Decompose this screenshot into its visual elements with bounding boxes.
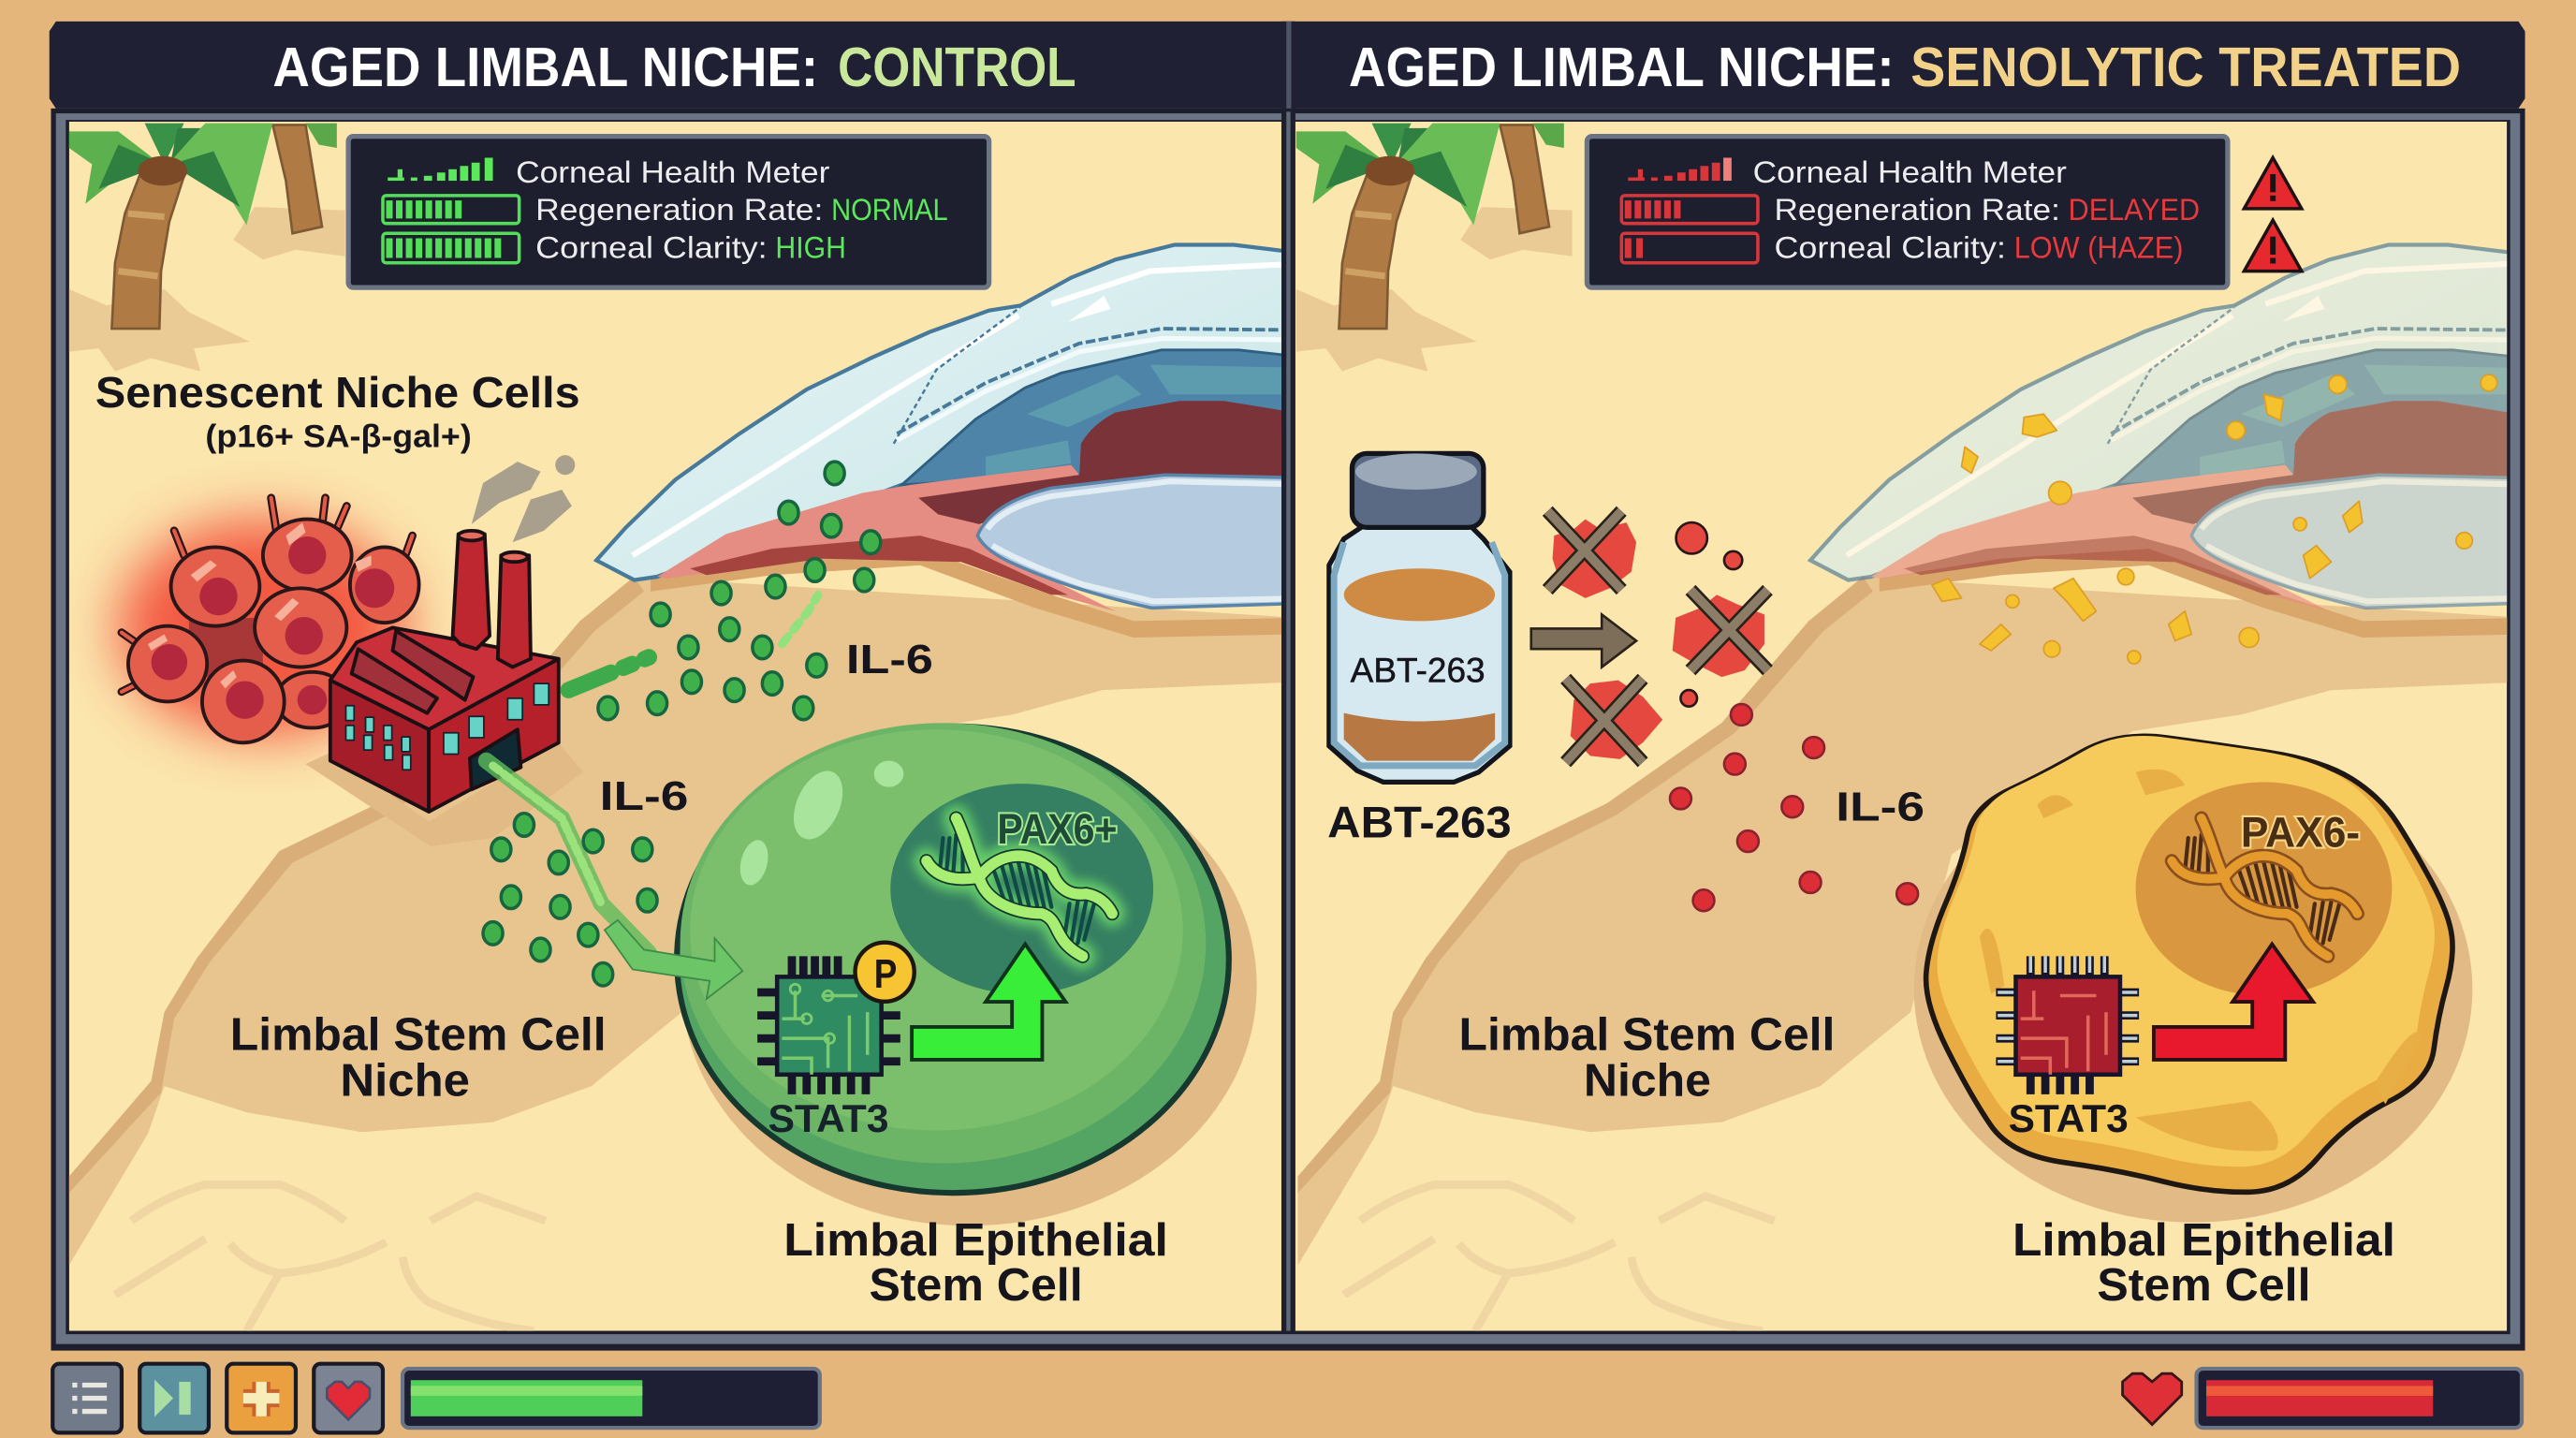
spiky protrusions	[122, 498, 413, 692]
label: limbal stem cell niche control: Limbal Stem Cell	[230, 1009, 607, 1060]
regeneration bar	[383, 196, 520, 224]
damaged yellow stem cell	[1926, 736, 2452, 1192]
signal icon	[1628, 157, 1732, 181]
warning icon lower	[2244, 220, 2302, 271]
label: senescent niche cells	[95, 368, 580, 454]
label: senescent niche cells: Senescent Niche Cells	[95, 368, 580, 417]
STAT3 label: STAT3	[768, 1096, 889, 1140]
button: plus	[227, 1364, 296, 1432]
corneal health meter: control: Regeneration Rate:	[535, 193, 823, 227]
label: limbal epithelial stem cell treated	[2012, 1215, 2395, 1311]
yellow debris	[1932, 374, 2497, 664]
progress bar: treated	[2197, 1369, 2522, 1428]
green stem cell	[677, 723, 1229, 1193]
warning icon upper	[2244, 157, 2302, 209]
corneal health meter: control	[348, 137, 989, 287]
nucleus	[2136, 782, 2392, 996]
senescent cell glow	[118, 520, 407, 736]
bottle: ABT-263	[1351, 651, 1486, 689]
green IL-6 stream	[487, 594, 818, 953]
label: limbal stem cell niche treated	[1459, 1009, 1835, 1107]
corneal health meter: control: HIGH	[775, 231, 846, 265]
sand ground and ripples	[69, 549, 1298, 1331]
button: menu	[52, 1364, 122, 1432]
nucleus	[890, 784, 1153, 994]
bottle	[1329, 453, 1510, 782]
corneal health meter: control: Corneal Health Meter	[516, 155, 830, 189]
shadow under stem cell	[1914, 756, 2472, 1223]
corneal health meter: treated: Regeneration Rate:	[1774, 193, 2060, 227]
red elbow arrow	[2154, 944, 2313, 1060]
label: limbal stem cell niche control: Niche	[340, 1056, 470, 1107]
heart icon	[2123, 1373, 2182, 1425]
drug arrow	[1531, 614, 1636, 668]
label: limbal epithelial stem cell treated: Stem Cell	[2097, 1260, 2311, 1311]
label: limbal epithelial stem cell control	[783, 1215, 1168, 1311]
label: IL-6 upper: IL-6	[846, 637, 933, 682]
corneal health meter: control: Corneal Clarity:	[535, 231, 768, 265]
PAX6- label: PAX6-	[2241, 809, 2360, 857]
red IL-6 particles	[1670, 704, 1918, 911]
label: limbal stem cell niche control	[230, 1009, 607, 1107]
DNA helix	[927, 818, 1112, 956]
factory	[330, 531, 559, 812]
green elbow arrow	[912, 944, 1065, 1060]
signal arrow into cell	[605, 920, 742, 999]
heading: control: CONTROL	[838, 36, 1076, 98]
heading: senolytic treated	[1349, 36, 2461, 98]
button: heart	[314, 1364, 383, 1432]
progress bar: control	[402, 1369, 820, 1428]
label: limbal stem cell niche treated: Limbal Stem Cell	[1459, 1009, 1835, 1060]
corneal health meter: treated: Corneal Health Meter	[1753, 155, 2067, 189]
heading: senolytic treated: AGED LIMBAL NICHE:	[1349, 36, 1895, 98]
IL-6 particles lower	[483, 814, 657, 986]
cell mottling	[1980, 770, 2422, 1152]
phosphate coin	[856, 943, 915, 1002]
corneal health meter: treated: Corneal Clarity:	[1774, 231, 2006, 265]
corneal health meter: control: NORMAL	[831, 193, 948, 227]
label: senescent niche cells: (p16+ SA-β-gal+)	[205, 418, 472, 454]
shadow under stem cell	[687, 824, 1257, 1225]
destroyed cell 1	[1547, 511, 1636, 598]
regeneration bar	[1621, 196, 1758, 224]
STAT3 chip red	[1996, 956, 2139, 1094]
STAT3 label: STAT3	[2009, 1096, 2129, 1140]
hazy eye cross-section	[1810, 244, 2528, 611]
clarity bar	[383, 233, 520, 263]
label: IL-6 lower: IL-6	[600, 773, 688, 819]
title bar	[50, 22, 2525, 109]
smoke	[472, 455, 575, 542]
heading: control: AGED LIMBAL NICHE:	[272, 36, 818, 98]
destroyed cell 2	[1673, 590, 1767, 677]
label: limbal epithelial stem cell control: Limbal Epithelial	[783, 1215, 1168, 1266]
STAT3 chip	[757, 956, 900, 1094]
cell fragments	[1676, 522, 1742, 707]
label: limbal epithelial stem cell treated: Limbal Epithelial	[2012, 1215, 2395, 1266]
label: limbal epithelial stem cell control: Stem Cell	[869, 1260, 1083, 1311]
signal icon	[388, 157, 493, 181]
button: skip	[139, 1364, 209, 1432]
cell highlights	[736, 761, 903, 888]
corneal health meter: treated: LOW (HAZE)	[2014, 231, 2183, 265]
IL-6 particles upper	[598, 462, 881, 720]
clarity bar	[1621, 233, 1758, 263]
eye cross-section	[596, 244, 1314, 611]
senescent niche cells	[122, 498, 419, 742]
label: limbal stem cell niche treated: Niche	[1584, 1056, 1711, 1107]
heading: senolytic treated: SENOLYTIC TREATED	[1910, 36, 2461, 98]
panel: senolytic treated	[1295, 122, 2528, 1331]
palm trees	[69, 124, 345, 372]
PAX6+ label: PAX6+	[997, 805, 1117, 853]
destroyed cell 3	[1566, 679, 1662, 762]
label: IL-6 treated: IL-6	[1836, 785, 1925, 830]
center divider	[1281, 22, 1295, 1331]
panel: control	[69, 122, 1314, 1331]
phosphate coin: P	[874, 951, 897, 997]
sand ground and ripples	[1298, 549, 2526, 1331]
corneal health meter: treated	[1587, 137, 2228, 287]
DNA helix	[2172, 818, 2358, 956]
factory shadow	[305, 742, 583, 846]
corneal health meter: treated: DELAYED	[2069, 193, 2200, 227]
palm trees	[1296, 124, 1573, 372]
label: ABT-263: ABT-263	[1327, 798, 1512, 847]
